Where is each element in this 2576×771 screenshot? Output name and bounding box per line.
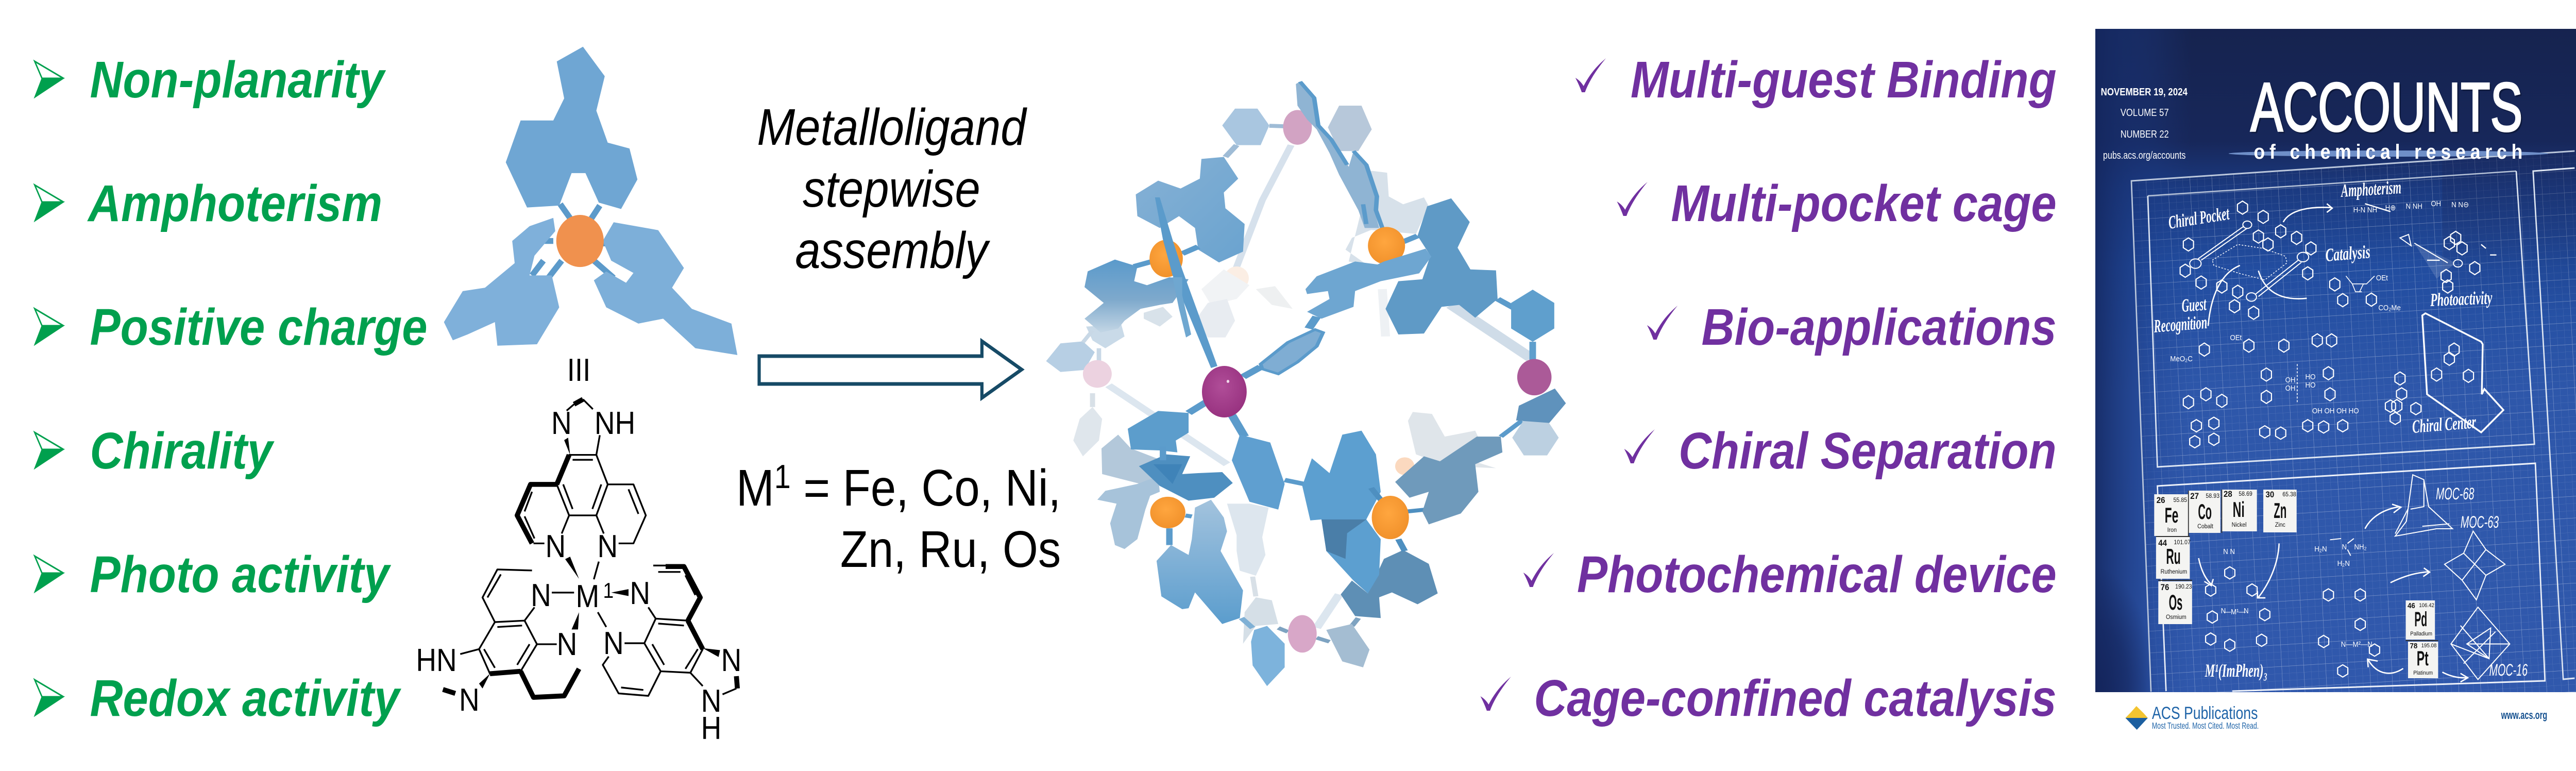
element tiles: Osmium — [2166, 614, 2187, 621]
handwritten labels: MOC-68 — [2436, 485, 2475, 503]
element tiles: Fe — [2165, 504, 2178, 528]
bullet: Redox activity: Redox activity — [90, 669, 401, 727]
bullet: Non-planarity: Non-planarity — [90, 51, 386, 109]
check item: Photochemical device: Photochemical device — [1577, 546, 2057, 604]
element tiles: 28 — [2224, 489, 2232, 499]
element tiles: Ni — [2233, 498, 2245, 522]
element tiles: 55.85 — [2174, 497, 2187, 504]
bullet: Amphoterism: Amphoterism — [87, 175, 382, 232]
element tiles: 195.08 — [2421, 643, 2437, 649]
chemical formula labels on blueprint: N NH — [2406, 202, 2422, 211]
element tiles: 65.38 — [2282, 491, 2296, 498]
element tiles: 78 — [2410, 642, 2417, 650]
chemical formula labels on blueprint: NH₂ — [2354, 543, 2367, 551]
text: ACS Publications: ACS Publications — [2152, 703, 2258, 723]
check item: Multi-guest Binding: Multi-guest Binding — [1631, 51, 2057, 109]
chemical formula labels on blueprint: N — [2244, 607, 2249, 615]
handwritten labels — [2153, 177, 2528, 681]
handwritten labels: Chiral Center — [2412, 412, 2477, 437]
issue details: NUMBER 22 — [2121, 129, 2169, 140]
element tiles: 76 — [2161, 582, 2170, 592]
list: applications (purple) — [1480, 51, 2057, 727]
chemical formula labels on blueprint: N — [2221, 607, 2226, 615]
handwritten labels: Guest — [2181, 294, 2208, 316]
handwritten labels: Photoactivity — [2430, 288, 2493, 310]
element tiles: Nickel — [2232, 522, 2247, 528]
element tiles: 26 — [2157, 495, 2165, 505]
chemical structure: M1(ImPhen)3 complex: III — [567, 353, 590, 388]
icon: ACS logo shield — [2125, 706, 2148, 730]
element tiles: 58.69 — [2239, 491, 2252, 497]
check item: Chiral Separation: Chiral Separation — [1679, 422, 2057, 480]
right node of cage — [1511, 290, 1566, 456]
text: metal list: = Fe, Co, Ni, — [791, 459, 1061, 517]
chemical formula labels on blueprint: OEt — [2230, 333, 2242, 342]
issue details: NOVEMBER 19, 2024 — [2101, 87, 2188, 98]
chemical structure: M1(ImPhen)3 complex: HN — [416, 643, 457, 678]
chemical formula labels on blueprint: CO₂Me — [2378, 304, 2401, 312]
upper half of cage, back layers first — [1046, 81, 1531, 388]
handwritten labels: Amphoterism — [2340, 177, 2402, 202]
handwritten labels: MOC-16 — [2489, 661, 2528, 679]
illustration: 3D metal-organic cage — [1046, 81, 1566, 686]
chemical structure: M1(ImPhen)3 complex: N — [557, 627, 577, 662]
chemical structure: M1(ImPhen)3 complex: N — [531, 578, 551, 613]
chemical formula labels on blueprint: N—M²—N — [2341, 640, 2372, 649]
chemical formula labels on blueprint: OH — [2431, 199, 2441, 208]
icon: blue metalloligand model with orange metal centre — [444, 47, 737, 355]
lower half of cage — [1073, 386, 1521, 686]
blueprint sketches — [2180, 201, 2503, 432]
chemical formula labels on blueprint: —M¹— — [2224, 608, 2246, 616]
element tiles: 46 — [2408, 601, 2415, 610]
masthead band — [2229, 150, 2548, 157]
chemical formula labels on blueprint: H-N NH — [2353, 206, 2377, 214]
element tiles: Pt — [2417, 647, 2429, 671]
heading: Metalloligand stepwise assembly — [757, 98, 1028, 279]
chemical formula labels on blueprint: N N — [2223, 547, 2235, 556]
element tiles: 27 — [2190, 491, 2199, 501]
element tiles: Cobalt — [2197, 523, 2214, 530]
heading: Metalloligand stepwise assembly: assembly — [795, 222, 990, 279]
issue details: VOLUME 57 — [2121, 107, 2169, 119]
chemical formula labels on blueprint: OH — [2285, 376, 2295, 384]
element tiles — [2154, 489, 2438, 678]
handwritten labels: Chiral Pocket — [2167, 204, 2231, 233]
check item: Multi-pocket cage: Multi-pocket cage — [1671, 175, 2057, 232]
list: properties (green) — [35, 51, 427, 727]
element tiles: Platinum — [2413, 671, 2433, 676]
check item: Bio-applications: Bio-applications — [1702, 298, 2057, 356]
chemical formula labels on blueprint: OEt — [2376, 274, 2388, 282]
bullet: Photo activity: Photo activity — [90, 546, 392, 604]
element tiles: 44 — [2158, 538, 2167, 548]
element tiles: Co — [2198, 500, 2212, 524]
chemical formula labels on blueprint: N N⊖ — [2451, 200, 2469, 209]
handwritten labels: Catalysis — [2325, 242, 2371, 265]
chemical formula labels on blueprint — [2170, 199, 2469, 649]
issue details — [2101, 87, 2188, 161]
chemical formula labels on blueprint: MeO₂C — [2170, 355, 2193, 363]
cover background with blueprint grid — [2095, 29, 2576, 692]
element tiles: Os — [2169, 591, 2182, 615]
handwritten labels: MOC-63 — [2461, 513, 2499, 531]
handwritten labels: Recognition — [2153, 312, 2208, 337]
chemical structure: M1(ImPhen)3 complex: N — [459, 682, 480, 718]
chemical structure: M1(ImPhen)3 complex: N — [551, 406, 572, 441]
issue details: pubs.acs.org/accounts — [2103, 150, 2185, 161]
chemical structure: M1(ImPhen)3 complex: H — [701, 711, 721, 746]
text: metal list — [736, 458, 1061, 578]
chemical structure: M1(ImPhen)3 complex: M — [575, 579, 599, 614]
chemical structure: M1(ImPhen)3 complex: N — [545, 529, 566, 564]
chemical structure: M1(ImPhen)3 complex: N — [630, 576, 650, 611]
text: metal list: Zn, Ru, Os — [840, 521, 1061, 578]
chemical structure: M1(ImPhen)3 complex: 1 — [603, 579, 614, 603]
element tiles: Palladium — [2410, 631, 2432, 637]
element tiles: 106.42 — [2419, 603, 2434, 609]
bullet: Chirality: Chirality — [90, 422, 275, 480]
chemical formula labels on blueprint: N — [2342, 543, 2347, 551]
chemical formula labels on blueprint: HO — [2306, 373, 2315, 381]
heading: Metalloligand stepwise assembly: Metalloligand — [757, 98, 1028, 156]
text: metal list: 1 — [774, 458, 791, 496]
text: ACS Publications — [2152, 703, 2259, 731]
chemical structure: M1(ImPhen)3 complex: N — [603, 626, 624, 661]
chemical formula labels on blueprint: OH OH OH HO — [2312, 407, 2359, 415]
chemical structure: M1(ImPhen)3 complex: N — [598, 529, 618, 564]
text: www.acs.org: www.acs.org — [2501, 709, 2547, 722]
chemical structure: M1(ImPhen)3 complex: N — [721, 643, 741, 678]
heading: Metalloligand stepwise assembly: stepwise — [803, 160, 980, 218]
chemical structure: M1(ImPhen)3 complex: NH — [595, 406, 635, 441]
handwritten labels: M¹(ImPhen)₃ — [2205, 661, 2267, 681]
element tiles: Pd — [2414, 608, 2427, 631]
element tiles: Iron — [2167, 527, 2177, 533]
chemical structure: M1(ImPhen)3 complex — [416, 353, 741, 746]
element tiles: 58.93 — [2206, 493, 2219, 499]
chemical structure: M1(ImPhen)3 complex: N — [701, 683, 721, 719]
element tiles: 190.23 — [2175, 583, 2192, 590]
central purple metal — [1202, 366, 1247, 417]
chemical formula labels on blueprint: H₂N — [2314, 545, 2327, 554]
check item: Cage-confined catalysis: Cage-confined catalysis — [1534, 669, 2057, 727]
chemical formula labels on blueprint: HO — [2306, 381, 2315, 390]
panel: journal cover — [2095, 29, 2576, 731]
arrow: assembly direction — [759, 341, 1022, 398]
element tiles: Zinc — [2275, 522, 2285, 528]
chemical formula labels on blueprint: OH — [2285, 384, 2295, 393]
masthead: ACCOUNTS of chemical research: of chemical research — [2253, 141, 2522, 164]
text: ACS Publications: Most Trusted. Most Cited. Most Read. — [2152, 720, 2259, 731]
element tiles: Zn — [2274, 499, 2286, 523]
element tiles: Ruthenium — [2161, 568, 2187, 575]
text: metal list: M — [736, 459, 774, 517]
bullet: Positive charge: Positive charge — [90, 298, 427, 356]
chemical formula labels on blueprint: H₂N — [2337, 559, 2350, 568]
element tiles: 30 — [2265, 490, 2274, 499]
element tiles: 101.07 — [2174, 539, 2191, 546]
chemical formula labels on blueprint: H⊕ — [2385, 204, 2396, 212]
element tiles: Ru — [2166, 545, 2181, 569]
